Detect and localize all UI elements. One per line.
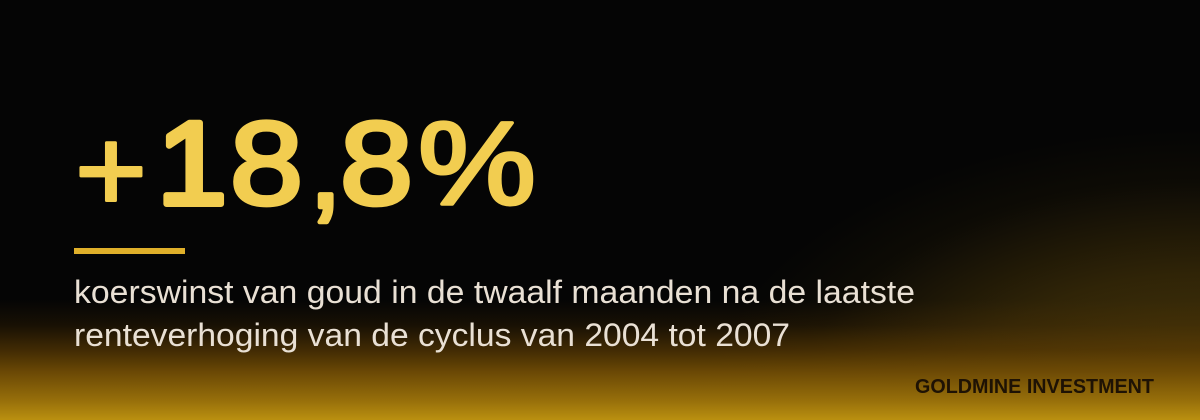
headline figure: ,	[309, 101, 342, 233]
brand name: GOLDMINE INVESTMENT	[915, 375, 1154, 398]
headline figure	[75, 98, 536, 237]
headline figure: +	[75, 105, 147, 237]
description text: koerswinst van goud in de twaalf maanden na de laatste	[74, 274, 915, 310]
headline figure: 8	[340, 98, 413, 230]
headline figure: 1	[157, 98, 227, 230]
headline figure: %	[418, 98, 536, 230]
headline figure: 8	[230, 98, 303, 230]
description text: renteverhoging van de cyclus van 2004 tot 2007	[74, 317, 790, 353]
description text	[74, 274, 915, 353]
divider rule	[74, 248, 185, 254]
